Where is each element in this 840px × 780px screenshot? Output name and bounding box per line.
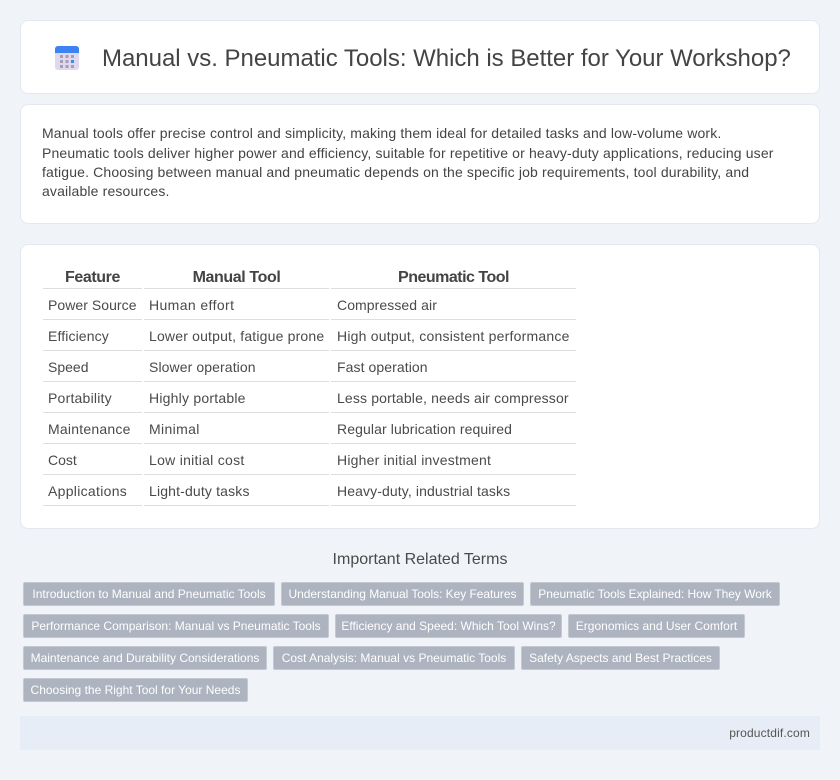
tag: Understanding Manual Tools: Key Features bbox=[289, 587, 516, 601]
table row: portability: Portability bbox=[48, 390, 112, 406]
tag: Pneumatic Tools Explained: How They Work bbox=[538, 587, 772, 601]
tag: Introduction to Manual and Pneumatic Tools bbox=[32, 587, 266, 601]
table row: efficiency: High output, consistent performance bbox=[337, 328, 570, 344]
table row: cost: Low initial cost bbox=[149, 452, 245, 468]
table row: speed: Fast operation bbox=[337, 359, 428, 375]
table row: speed bbox=[43, 359, 576, 382]
table row: applications: Light-duty tasks bbox=[149, 483, 250, 499]
table row: maintenance: Regular lubrication required bbox=[337, 421, 512, 437]
table row: efficiency: Lower output, fatigue prone bbox=[149, 328, 324, 344]
table row: cost bbox=[43, 452, 576, 475]
tag: Cost Analysis: Manual vs Pneumatic Tools bbox=[282, 651, 506, 665]
tag: Choosing the Right Tool for Your Needs bbox=[31, 683, 240, 697]
text block: intro paragraph: Pneumatic tools deliver higher power and efficiency, suitable for repetitive or heavy-duty applications, reducing user bbox=[42, 145, 774, 161]
table row: efficiency: Efficiency bbox=[48, 328, 109, 344]
table row: portability: Highly portable bbox=[149, 390, 246, 406]
table row: speed: Slower operation bbox=[149, 359, 256, 375]
tag bbox=[521, 646, 720, 670]
text block: intro paragraph: fatigue. Choosing between manual and pneumatic depends on the specific job requirements, tool durability, and bbox=[42, 164, 749, 180]
table row: portability: Less portable, needs air compressor bbox=[337, 390, 569, 406]
footer bar bbox=[20, 716, 820, 750]
tag list: related terms bbox=[23, 582, 780, 702]
panel: introduction text bbox=[20, 104, 820, 224]
tag bbox=[568, 614, 745, 638]
title: Manual vs. Pneumatic Tools: Which is Better for Your Workshop? bbox=[102, 45, 791, 72]
table row: maintenance: Maintenance bbox=[48, 421, 131, 437]
table header row: Feature bbox=[65, 269, 120, 286]
table header row: Pneumatic Tool bbox=[398, 269, 509, 286]
tag: Maintenance and Durability Considerations bbox=[31, 651, 259, 665]
table row: power source: Compressed air bbox=[337, 297, 437, 313]
tag bbox=[23, 582, 275, 606]
table row: applications: Heavy-duty, industrial tasks bbox=[337, 483, 510, 499]
icon: calendar app grid bbox=[55, 46, 79, 70]
table header row bbox=[43, 269, 576, 289]
tag bbox=[281, 582, 524, 606]
table row: efficiency bbox=[43, 328, 576, 351]
tag: Ergonomics and User Comfort bbox=[576, 619, 737, 633]
table row: cost: Cost bbox=[48, 452, 77, 468]
panel: comparison table bbox=[20, 244, 820, 529]
table row: maintenance bbox=[43, 421, 576, 444]
tag: Safety Aspects and Best Practices bbox=[529, 651, 712, 665]
text block: intro paragraph: Manual tools offer precise control and simplicity, making them ideal for detailed tasks and low-volume work. bbox=[42, 125, 721, 141]
heading: important related terms: Important Related Terms bbox=[333, 551, 507, 568]
table row: power source bbox=[43, 297, 576, 320]
table row: power source: Human effort bbox=[149, 297, 234, 313]
tag bbox=[23, 614, 329, 638]
table header row: Manual Tool bbox=[193, 269, 280, 286]
text block: intro paragraph bbox=[42, 125, 774, 199]
table row: power source: Power Source bbox=[48, 297, 137, 313]
table row: applications bbox=[43, 483, 576, 506]
table row: cost: Higher initial investment bbox=[337, 452, 491, 468]
footer source text: productdif.com bbox=[729, 726, 810, 740]
tag bbox=[273, 646, 515, 670]
tag bbox=[530, 582, 780, 606]
tag bbox=[23, 646, 267, 670]
table row: portability bbox=[43, 390, 576, 413]
tag bbox=[335, 614, 562, 638]
table row: maintenance: Minimal bbox=[149, 421, 200, 437]
panel: title header bbox=[20, 20, 820, 94]
tag bbox=[23, 678, 248, 702]
text block: intro paragraph: available resources. bbox=[42, 183, 170, 199]
tag: Efficiency and Speed: Which Tool Wins? bbox=[341, 619, 556, 633]
table row: applications: Applications bbox=[48, 483, 127, 499]
table row: speed: Speed bbox=[48, 359, 88, 375]
tag: Performance Comparison: Manual vs Pneumatic Tools bbox=[31, 619, 321, 633]
